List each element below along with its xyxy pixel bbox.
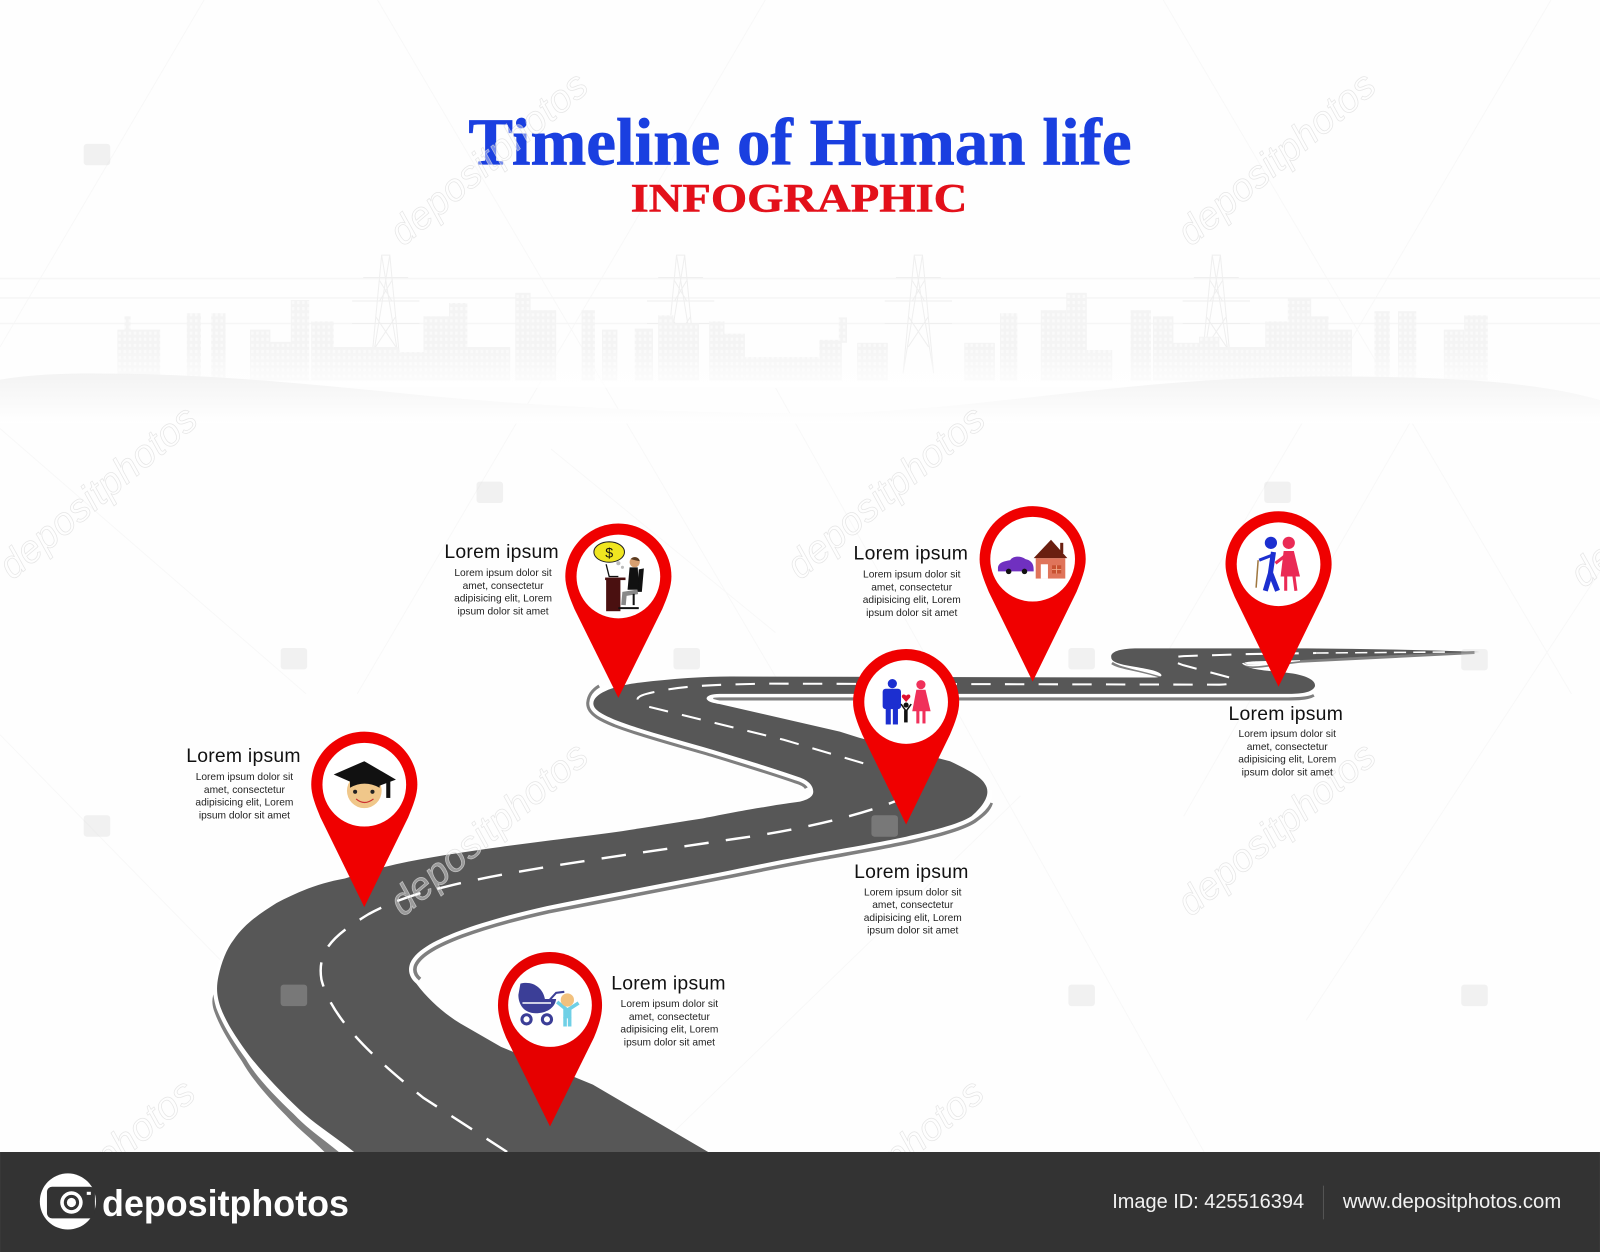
label: home: Lorem ipsum dolor sit	[863, 570, 961, 581]
label: home: ipsum dolor sit amet	[866, 608, 957, 619]
label: career: adipisicing elit, Lorem	[454, 594, 552, 605]
subtitle: INFOGRAPHIC	[631, 176, 967, 221]
label: graduation: ipsum dolor sit amet	[199, 810, 290, 821]
pin 4: family	[853, 649, 959, 824]
label: career: ipsum dolor sit amet	[457, 606, 549, 617]
label: old age: adipisicing elit, Lorem	[1238, 755, 1336, 766]
label: childhood: amet, consectetur	[629, 1012, 710, 1023]
label: graduation: Lorem ipsum	[186, 745, 301, 767]
depositphotos watermarks: depositphotos	[381, 64, 597, 254]
label: graduation: adipisicing elit, Lorem	[195, 798, 293, 809]
icon: elderly couple	[1256, 537, 1300, 591]
label: home	[854, 543, 968, 619]
label: family: adipisicing elit, Lorem	[864, 913, 962, 924]
pin 5: home and car	[980, 506, 1086, 682]
winding road	[212, 648, 1480, 1152]
icon: depositphotos camera logo	[40, 1173, 96, 1230]
label: childhood	[611, 972, 726, 1048]
depositphotos watermarks: depositphotos	[381, 734, 597, 924]
label: family: Lorem ipsum	[854, 861, 968, 883]
title: Timeline of Human life	[468, 106, 1132, 179]
label: graduation	[186, 745, 301, 821]
pin 3: career	[565, 523, 671, 698]
icon: graduate face and cap	[334, 761, 396, 808]
lane dashes	[321, 652, 1449, 1152]
depositphotos watermarks: depositphotos	[1169, 64, 1384, 254]
label: old age: amet, consectetur	[1247, 742, 1328, 753]
depositphotos watermarks: depositphotos	[778, 397, 993, 588]
background skyline with power pylons and hill	[0, 255, 1600, 423]
pin 2: graduation	[311, 732, 417, 907]
icon: office worker at desk: $	[605, 546, 613, 562]
icon: car and house	[998, 540, 1067, 579]
label: old age: ipsum dolor sit amet	[1242, 767, 1333, 778]
label: home: amet, consectetur	[871, 582, 953, 593]
depositphotos watermarks: depositphotos	[1169, 734, 1384, 924]
label: old age: Lorem ipsum dolor sit	[1239, 729, 1336, 740]
label: old age	[1229, 703, 1343, 778]
label: career: Lorem ipsum dolor sit	[454, 568, 552, 579]
footer bar	[0, 1152, 1600, 1252]
pin 6: old age	[1225, 511, 1332, 687]
icon: office worker at desk	[594, 542, 644, 611]
label: career	[444, 541, 559, 617]
pin 1: childhood	[498, 952, 602, 1126]
label: family: Lorem ipsum dolor sit	[864, 887, 962, 898]
icon: pram and baby	[518, 983, 579, 1026]
label: family	[854, 861, 968, 937]
footer url: www.depositphotos.com	[1342, 1191, 1561, 1213]
road surface	[217, 648, 1480, 1152]
label: childhood: Lorem ipsum	[611, 972, 726, 994]
footer brand name: depositphotos	[102, 1183, 349, 1224]
label: childhood: Lorem ipsum dolor sit	[621, 999, 718, 1010]
label: childhood: adipisicing elit, Lorem	[620, 1025, 718, 1036]
label: career: Lorem ipsum	[444, 541, 559, 563]
label: family: amet, consectetur	[872, 900, 954, 911]
label: home: Lorem ipsum	[854, 543, 968, 565]
label: childhood: ipsum dolor sit amet	[624, 1037, 715, 1048]
label: graduation: amet, consectetur	[204, 785, 285, 796]
icon: parents and child	[883, 679, 931, 724]
label: family: ipsum dolor sit amet	[867, 926, 958, 937]
label: home: adipisicing elit, Lorem	[863, 595, 961, 606]
label: old age: Lorem ipsum	[1229, 703, 1343, 725]
label: graduation: Lorem ipsum dolor sit	[196, 772, 293, 783]
label: career: amet, consectetur	[463, 581, 544, 592]
footer image id: Image ID: 425516394	[1112, 1191, 1304, 1213]
road shoulders	[212, 653, 1474, 1152]
